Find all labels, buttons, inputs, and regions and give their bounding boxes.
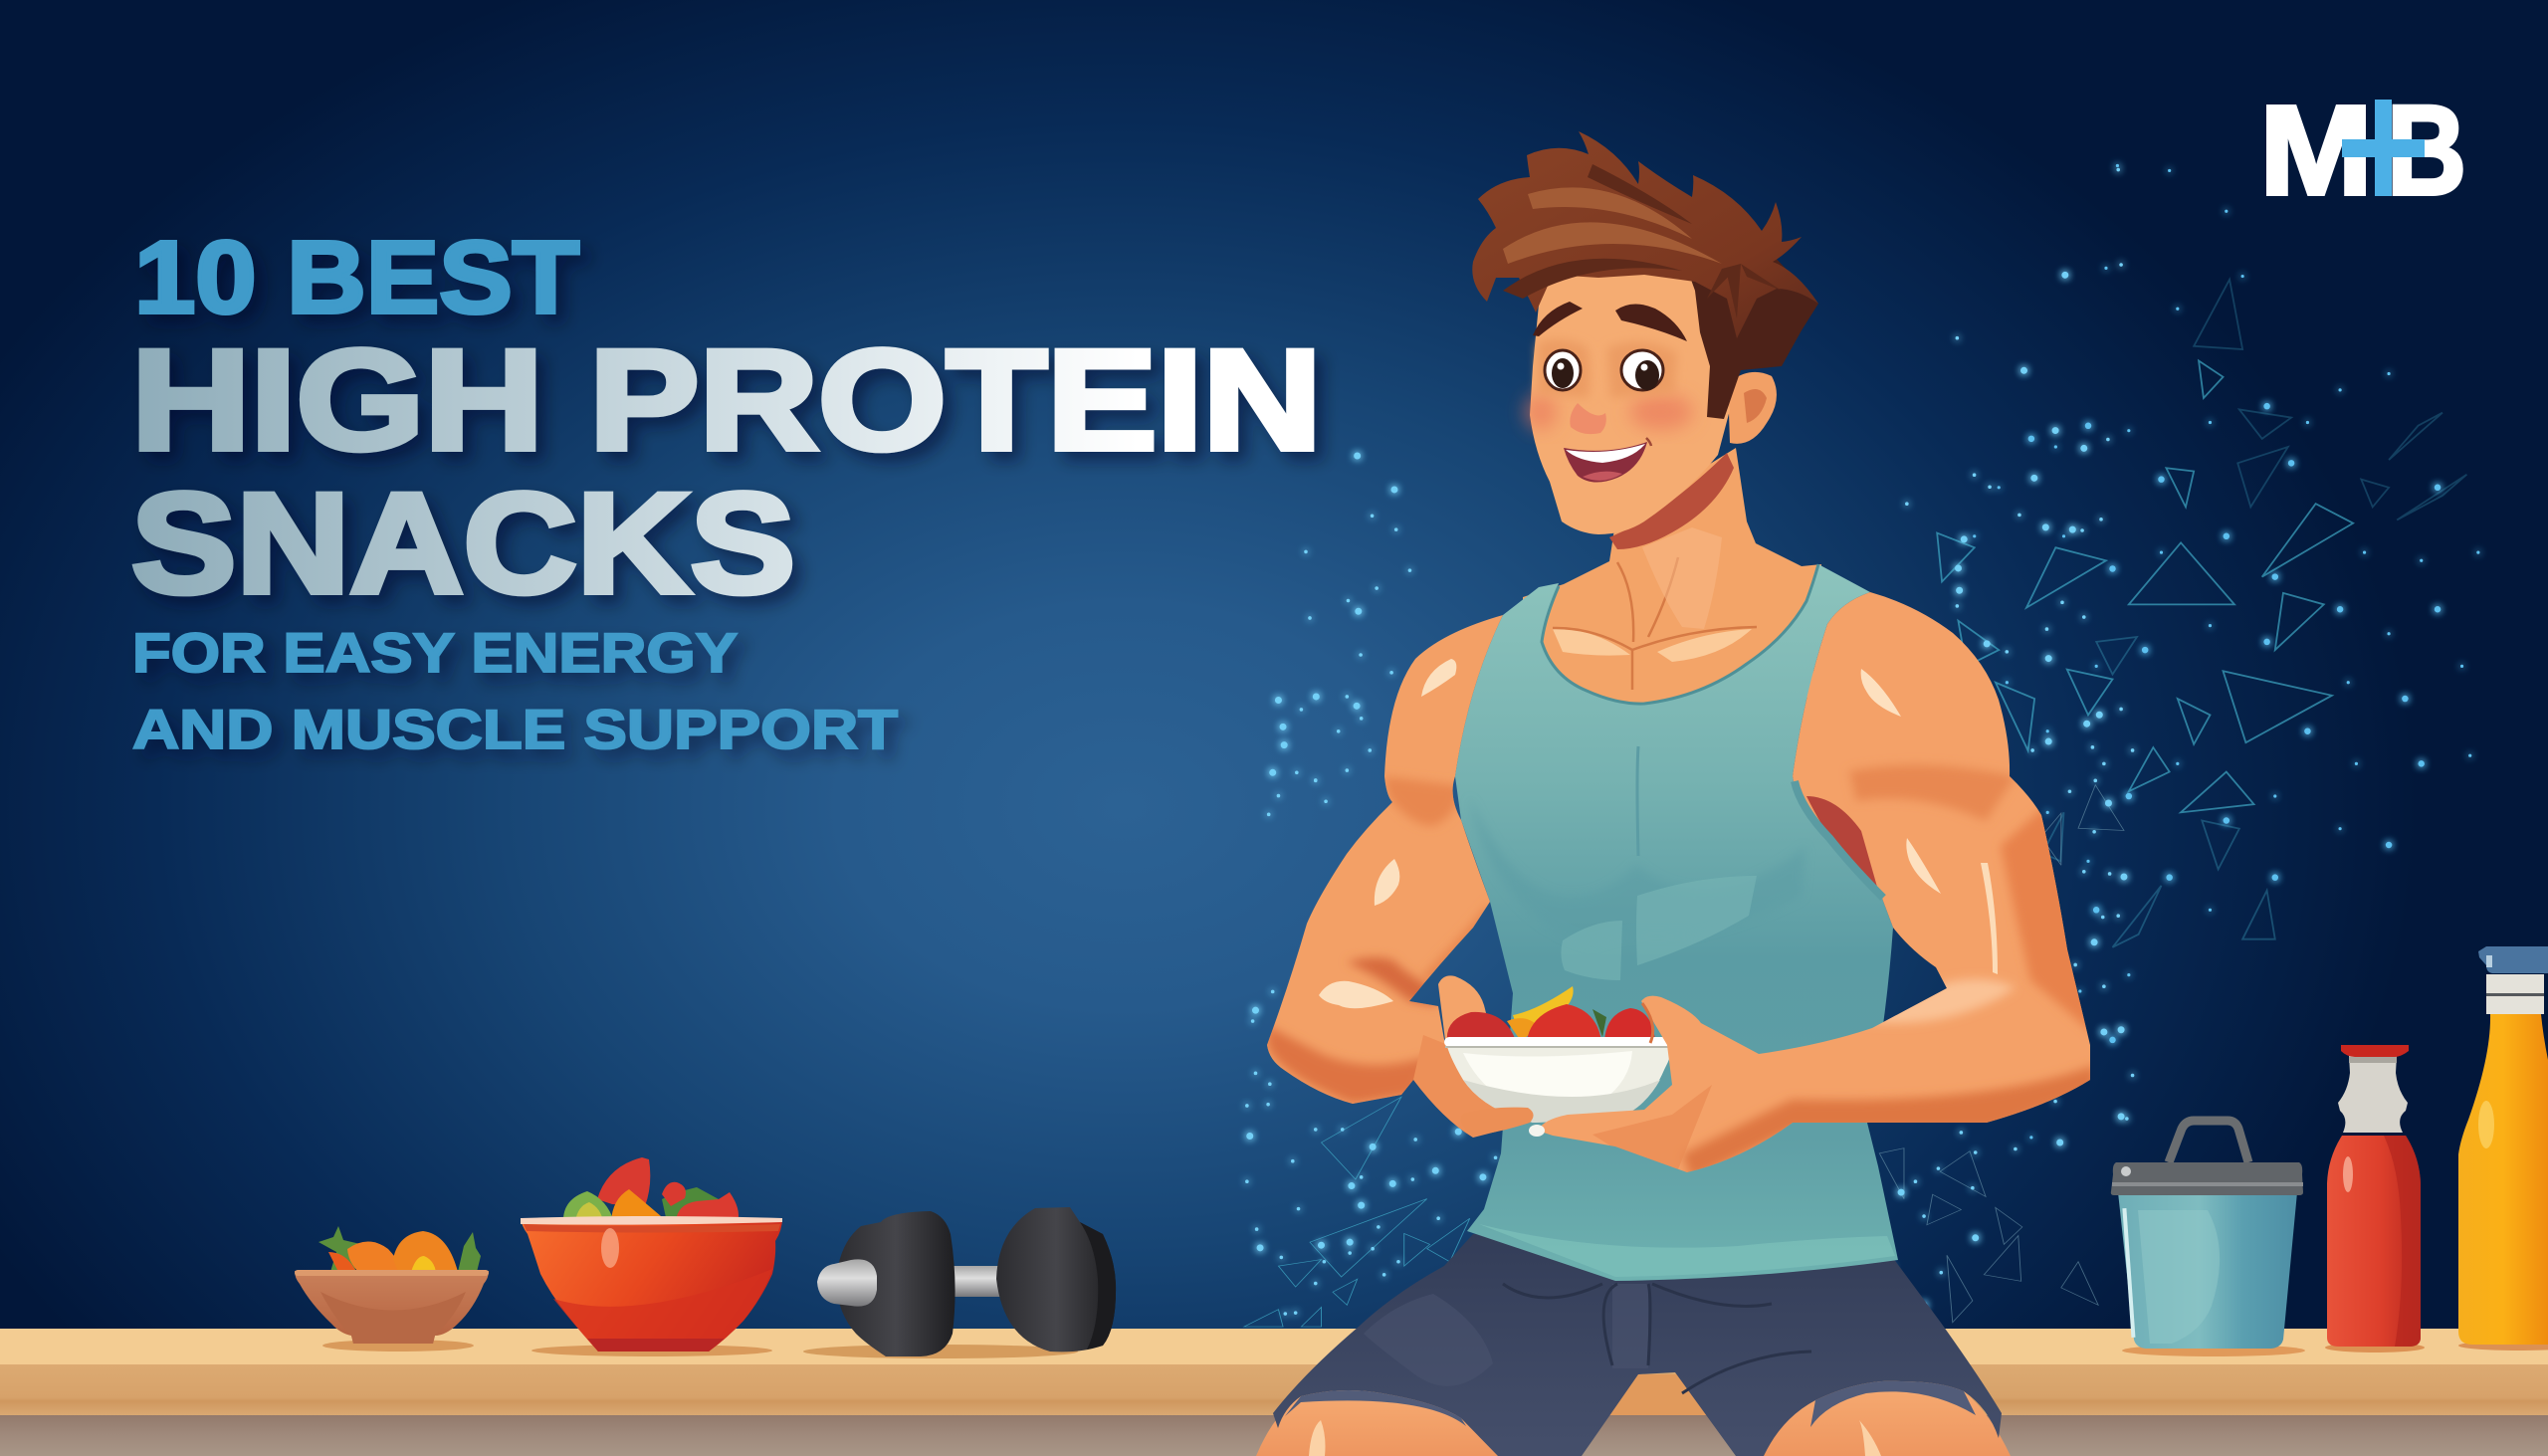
particle field: triangles and glowing dots: [1244, 166, 2478, 1327]
tank muscle shading: [1469, 796, 1805, 945]
chest and neck skin: [1523, 448, 1821, 727]
hair strands: [1503, 187, 1722, 264]
left fingers: [1461, 1108, 1534, 1136]
title block: [131, 220, 1322, 760]
left arm (viewer): [1267, 615, 1503, 1104]
logo plus sign: [2342, 100, 2425, 196]
right arm highlights: [1861, 669, 1941, 894]
orange juice bottle: [2458, 946, 2548, 1351]
thigh highlights: [1309, 1420, 1881, 1456]
dumbbell bar: [951, 1266, 1040, 1297]
shorts folds: [1285, 1381, 1976, 1427]
hair: [1472, 131, 1818, 338]
cheeks: [1525, 394, 1693, 430]
heading line: high protein: HIGH PROTEIN: [131, 321, 1322, 480]
cooler container: [2111, 1121, 2305, 1356]
chest details: [1553, 629, 1752, 662]
face: [1530, 269, 1730, 534]
carrots: [347, 1242, 404, 1272]
eye socket shading: [1538, 339, 1677, 398]
eyes: [1545, 350, 1663, 390]
triangles lower left and lower right: [1244, 785, 2124, 1327]
leaves: [318, 1226, 481, 1272]
triangles upper right: [1937, 280, 2466, 947]
eyebrows: [1533, 302, 1687, 341]
left arm forearm shading: [1267, 1025, 1433, 1104]
character: man holding a snack bowl: [1254, 131, 2100, 1456]
head: [1472, 131, 1818, 534]
left thumb: [1438, 975, 1493, 1040]
nose: [1570, 403, 1606, 434]
dumbbell: [803, 1207, 1116, 1358]
red juice bottle: [2325, 1045, 2425, 1352]
right thigh: [1759, 1381, 2011, 1456]
logo: [2259, 80, 2466, 222]
right plates: [996, 1207, 1116, 1352]
tank top: [1455, 564, 1898, 1281]
tank armhole band: [1795, 781, 1883, 898]
table top: [0, 1329, 2548, 1364]
left plates: [836, 1211, 956, 1356]
shorts: [1273, 1234, 2002, 1456]
large red bowl with fruit: [521, 1157, 782, 1356]
right arm shading: [1849, 765, 2016, 821]
cooler body: [2118, 1192, 2297, 1349]
glowing dots: [1247, 166, 2478, 1314]
table: [0, 1329, 2548, 1456]
left palm: [1413, 1035, 1533, 1138]
cooler handle: [2169, 1121, 2248, 1162]
red bottle neck: [2338, 1055, 2408, 1133]
fruit: [597, 1157, 650, 1206]
subheading line 2: AND MUSCLE SUPPORT: [132, 698, 898, 760]
floor: [0, 1415, 2548, 1456]
orange bottle cap: [2478, 946, 2548, 973]
heading line: 10 best: 10 BEST: [134, 220, 579, 334]
logo letter M: M: [2259, 80, 2373, 222]
subheading line 1: FOR EASY ENERGY: [132, 621, 738, 684]
heading line: snacks: SNACKS: [131, 465, 795, 623]
dumbbell end stub: [817, 1259, 877, 1307]
chin shadow on neck: [1609, 453, 1734, 549]
right arm (viewer): [1523, 587, 2100, 1184]
red bottle cap: [2341, 1045, 2409, 1057]
red bottle body: [2327, 1136, 2421, 1347]
white blob under bowl: [1529, 1125, 1545, 1137]
snack bowl: [1444, 1037, 1676, 1123]
tank neckline band: [1542, 564, 1818, 704]
table front edge: [0, 1364, 2548, 1415]
left arm highlights: [1319, 659, 1456, 1008]
fruit in hand bowl: [1447, 986, 1655, 1041]
logo letter B: B: [2387, 80, 2466, 222]
orange bottle neck: [2486, 974, 2544, 1014]
armpit shadow: [1806, 796, 1879, 894]
orange bottle body: [2458, 1014, 2548, 1345]
gap shadow under shorts: [1607, 1374, 1722, 1415]
left thigh: [1256, 1390, 1498, 1456]
ear: [1728, 372, 1777, 444]
cooler lid: [2111, 1162, 2303, 1195]
bowl body: [521, 1218, 782, 1352]
hair dark side: [1687, 254, 1818, 419]
mouth: [1564, 438, 1651, 483]
small wooden bowl with vegetables: [295, 1226, 489, 1352]
